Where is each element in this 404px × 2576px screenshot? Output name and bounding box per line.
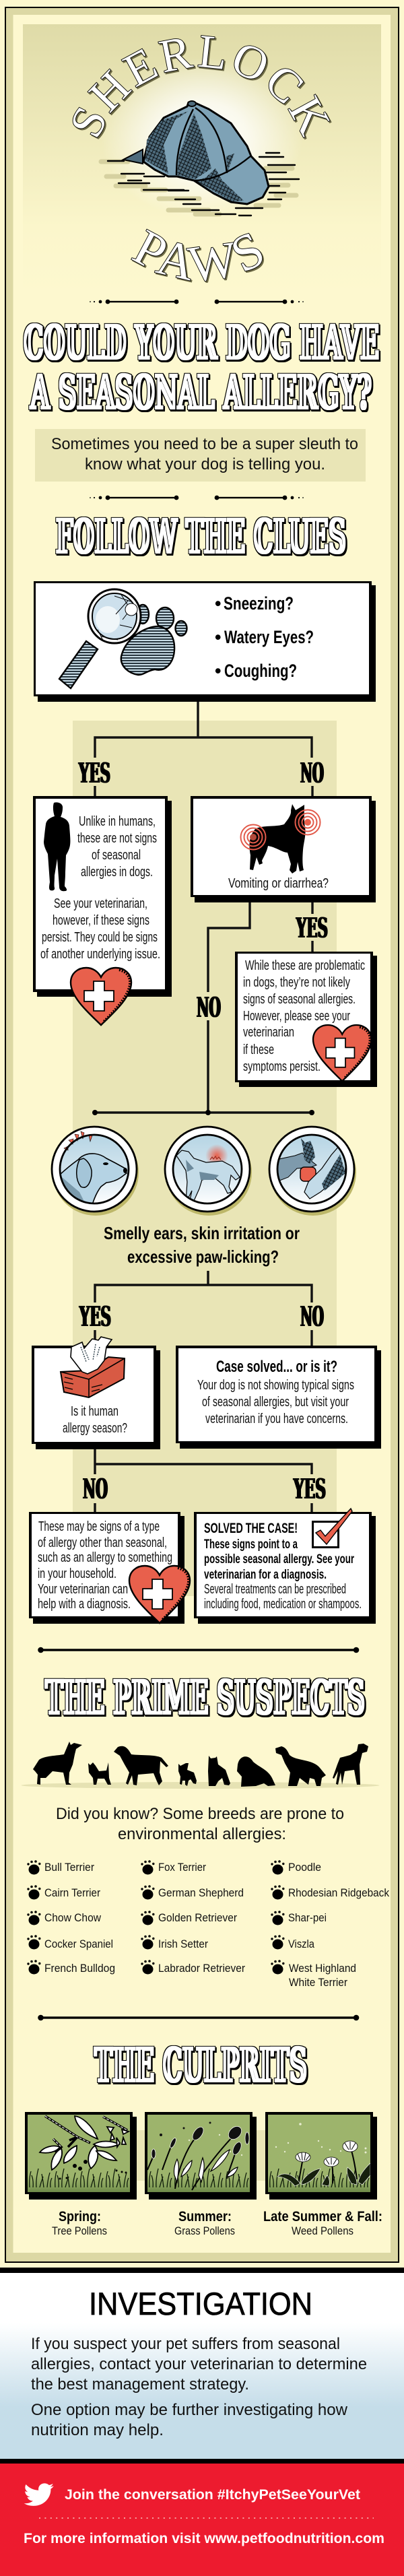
tan flowchart column: [73, 721, 337, 1596]
text: investigation body: allergies, contact your veterinarian to determine: [31, 2355, 367, 2373]
label: yes: YES: [79, 1300, 111, 1333]
panel: summer grass pollens: [145, 2112, 257, 2200]
panel: framed poster: NO: [300, 1300, 324, 1333]
icon: paw licking: [269, 1127, 356, 1216]
panel: see your veterinarian: [235, 952, 377, 1087]
column 3: Poodle: [288, 1861, 321, 1874]
column 2: Irish Setter: [158, 1938, 208, 1950]
intro callout: [35, 429, 366, 482]
text: is it human allergy season: [63, 1404, 127, 1436]
text: unlike in humans: of seasonal: [92, 848, 141, 863]
dog 1: [33, 1742, 82, 1785]
panel: late summer and fall weed pollens: [265, 2112, 377, 2200]
text: did you know: [56, 1805, 344, 1843]
logo word: Paws: PAWS: [131, 229, 264, 283]
dog 4: [178, 1763, 197, 1786]
panel: framed poster: NO: [197, 991, 221, 1024]
label: no: NO: [83, 1473, 108, 1505]
dog 3: [114, 1746, 168, 1785]
clue list: [215, 593, 314, 681]
column 2: Fox Terrier: [158, 1861, 206, 1874]
text: while these are problematic: veterinarian: [243, 1025, 294, 1040]
text: unlike in humans: allergies in dogs.: [81, 865, 153, 880]
divider: [38, 2015, 359, 2020]
text: other allergy: help with a diagnosis.: [38, 1597, 131, 1612]
panel: human allergy season: [32, 1337, 160, 1449]
column 2: Golden Retriever: [158, 1911, 237, 1924]
culprit labels: Spring:: [59, 2209, 101, 2224]
panel: footer call to action: [0, 2464, 404, 2576]
text: other allergy: These may be signs of a type: [38, 1519, 160, 1534]
text: did you know: Did you know? Some breeds are prone to: [56, 1805, 344, 1823]
clue list: Sneezing?: [224, 593, 294, 614]
clue list: Watery Eyes?: [224, 627, 314, 647]
intro callout: know what your dog is telling you.: [85, 455, 325, 473]
text: unlike in humans: Unlike in humans,: [79, 814, 156, 829]
column 3: White Terrier: [289, 1976, 347, 1989]
culprit labels: Grass Pollens: [174, 2224, 235, 2237]
text: other allergy: of allergy other than seasonal,: [38, 1535, 167, 1550]
panel: spring tree pollens: [25, 2112, 137, 2200]
text: solved the case: [204, 1521, 362, 1612]
breed list: [27, 1860, 389, 1989]
question: smelly ears, skin irritation or excessive paw-licking: Smelly ears, skin irritation or: [104, 1223, 300, 1243]
text: other allergy: [38, 1519, 172, 1612]
icon: person silhouette: [44, 802, 70, 891]
icon: smelly ears: [52, 1127, 139, 1216]
text: solved the case: veterinarian for a diagnosis.: [204, 1568, 327, 1582]
text: investigation body: One option may be further investigating how: [31, 2401, 347, 2419]
text: unlike in humans: See your veterinarian,: [54, 896, 147, 911]
text: unlike in humans: of another underlying issue.: [40, 947, 160, 962]
dog 5: [208, 1756, 230, 1786]
label: yes: YES: [296, 912, 328, 944]
panel: vomiting or diarrhea: [191, 796, 376, 902]
icon: magnifier over paw: [59, 589, 187, 688]
panel: unlike in humans: [33, 796, 172, 1025]
text: while these are problematic: in dogs, they’re not likely: [243, 975, 350, 990]
column 1: French Bulldog: [44, 1962, 115, 1975]
text: case solved: veterinarian if you have concerns.: [205, 1412, 348, 1426]
icon: tissue box: [61, 1337, 125, 1397]
column 2: Labrador Retriever: [158, 1962, 245, 1975]
column 1: Cairn Terrier: [44, 1886, 100, 1899]
text: did you know: environmental allergies:: [118, 1825, 286, 1843]
label: yes: YES: [293, 1473, 326, 1505]
icon: skin irritation: [165, 1127, 252, 1216]
question: smelly ears, skin irritation or excessive paw-licking: [104, 1223, 300, 1267]
text: investigation body: If you suspect your pet suffers from seasonal: [31, 2335, 340, 2353]
culprit labels: Summer:: [178, 2209, 232, 2224]
panel: solved the case: [194, 1509, 376, 1624]
text: unlike in humans: however, if these signs: [53, 913, 149, 928]
text: investigation body: [31, 2335, 367, 2439]
text: more information: For more information visit www.petfoodnutrition.com: [24, 2531, 384, 2546]
text: investigation body: the best management strategy.: [31, 2375, 249, 2393]
title: could your dog have a seasonal allergy: [24, 315, 379, 420]
text: investigation body: nutrition may help.: [31, 2421, 164, 2439]
column 3: Rhodesian Ridgeback: [288, 1886, 389, 1899]
text: case solved: Case solved... or is it?: [216, 1358, 337, 1376]
icon: heart with cross: [313, 1025, 371, 1081]
text: while these are problematic: signs of seasonal allergies.: [243, 992, 356, 1007]
text: while these are problematic: [243, 958, 365, 1074]
heading: investigation: INVESTIGATION: [89, 2286, 312, 2321]
culprit labels: Late Summer & Fall:: [263, 2209, 382, 2224]
culprit labels: Tree Pollens: [52, 2224, 107, 2237]
text: case solved: of seasonal allergies, but visit your: [202, 1395, 349, 1410]
dog 8: [333, 1744, 368, 1785]
column 1: Bull Terrier: [44, 1861, 94, 1874]
divider: [38, 1647, 359, 1653]
culprit labels: [52, 2209, 382, 2237]
icon: twitter bird: [24, 2483, 54, 2506]
dog 7: [275, 1746, 326, 1786]
text: unlike in humans: [40, 814, 160, 962]
column 1: Cocker Spaniel: [44, 1938, 113, 1950]
panel: symptoms: [34, 581, 376, 702]
question: smelly ears, skin irritation or excessive paw-licking: excessive paw-licking?: [127, 1247, 279, 1267]
flowchart connectors: [95, 702, 312, 1513]
column 3: Viszla: [288, 1938, 314, 1950]
intro callout: Sometimes you need to be a super sleuth to: [51, 435, 358, 453]
column 3: West Highland: [289, 1962, 356, 1975]
text: solved the case: These signs point to a: [204, 1538, 298, 1552]
text: other allergy: such as an allergy to something: [38, 1550, 172, 1565]
text: case solved: [197, 1358, 354, 1426]
icon: heart with cross: [71, 968, 131, 1025]
column 2: [141, 1860, 245, 1975]
text: while these are problematic: if these: [243, 1043, 274, 1057]
icon: deerstalker hat: [101, 101, 299, 216]
logo: Sherlock Paws: [73, 35, 332, 283]
panel: framed poster: NO: [300, 757, 324, 789]
clue list: •: [215, 627, 221, 647]
clue list: Coughing?: [224, 661, 297, 681]
panel: case solved or is it: [176, 1346, 381, 1449]
panel: investigation: [0, 2268, 404, 2464]
text: while these are problematic: symptoms persist.: [243, 1059, 321, 1074]
column 1: [27, 1860, 115, 1975]
dog 6: [237, 1756, 275, 1787]
column 3: [271, 1860, 389, 1989]
panel: other allergy: [29, 1512, 190, 1624]
dog silhouettes lineup: [22, 1742, 380, 1789]
text: other allergy: Your veterinarian can: [38, 1582, 128, 1597]
divider: [90, 496, 304, 500]
text: is it human allergy season: Is it human: [71, 1404, 119, 1419]
column 1: Chow Chow: [44, 1911, 102, 1924]
label: yes: YES: [78, 757, 110, 789]
fork with three nodes: [92, 1110, 314, 1115]
logo word: Sherlock: SHERLOCK: [73, 35, 332, 140]
dotted divider: [39, 2517, 374, 2519]
culprit labels: Weed Pollens: [292, 2224, 354, 2237]
text: while these are problematic: However, please see your: [243, 1009, 350, 1024]
text: other allergy: in your household.: [38, 1566, 116, 1581]
text: solved the case: SOLVED THE CASE!: [204, 1521, 298, 1536]
text: vomiting or diarrhea: Vomiting or diarrhea?: [228, 876, 329, 891]
icon: dog with target marks: [241, 804, 321, 873]
text: unlike in humans: persist. They could be signs: [42, 930, 158, 945]
icon: checkbox: [312, 1509, 352, 1548]
clue list: •: [215, 593, 221, 614]
dog 2: [88, 1762, 111, 1785]
text: join the conversation: Join the conversation #ItchyPetSeeYourVet: [65, 2487, 360, 2503]
text: unlike in humans: these are not signs: [77, 831, 157, 846]
column 2: German Shepherd: [158, 1886, 244, 1899]
column 3: Shar-pei: [288, 1911, 327, 1924]
divider: [90, 300, 304, 304]
icon: heart with cross: [129, 1566, 190, 1623]
text: is it human allergy season: allergy season?: [63, 1421, 127, 1436]
clue list: •: [215, 661, 221, 681]
